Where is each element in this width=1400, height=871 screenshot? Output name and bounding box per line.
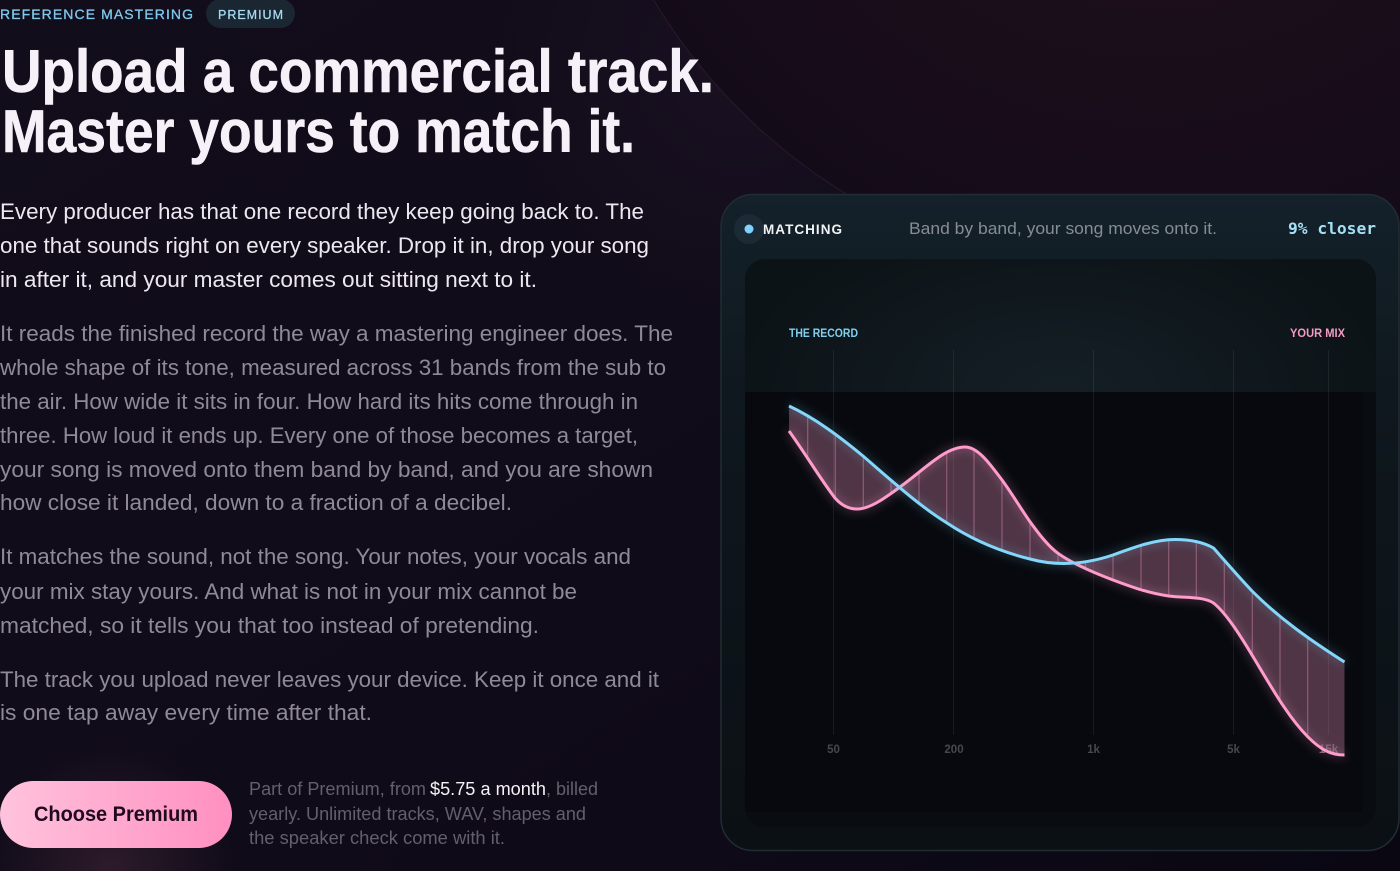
curve: your mix (789, 431, 1344, 755)
title: Upload a commercial track. (2, 38, 714, 105)
eyebrow label: REFERENCE MASTERING (0, 6, 193, 22)
title: Master yours to match it. (2, 98, 635, 165)
lead paragraph: in after it, and your master comes out sitting next to it. (0, 267, 537, 292)
lead paragraph (0, 199, 649, 292)
paragraph: how it reads the record (0, 321, 673, 515)
paragraph: how it reads the record: your song is moved onto them band by band, and you are shown (0, 457, 653, 482)
paragraph: how it reads the record: the air. How wide it sits in four. How hard its hits come through in (0, 389, 638, 414)
paragraph: sound not song: your mix stay yours. And what is not in your mix cannot be (0, 579, 577, 604)
paragraph: privacy: is one tap away every time after that. (0, 700, 372, 725)
status indicator: MATCHING (763, 222, 842, 237)
frequency tick labels: 200 (944, 744, 964, 756)
pricing note: yearly. Unlimited tracks, WAV, shapes and (249, 804, 586, 824)
pricing note: Part of Premium, from (249, 779, 426, 799)
paragraph: how it reads the record: It reads the finished record the way a mastering engineer does. The (0, 321, 673, 346)
paragraph: sound not song (0, 544, 631, 638)
premium pill: PREMIUM (218, 8, 283, 22)
lead paragraph: one that sounds right on every speaker. Drop it in, drop your song (0, 233, 649, 258)
frequency tick labels: 1k (1087, 744, 1100, 756)
paragraph: sound not song: matched, so it tells you that too instead of pretending. (0, 613, 539, 638)
button: choose premium: Choose Premium (34, 803, 198, 826)
frequency tick labels (827, 744, 1339, 756)
paragraph: how it reads the record: how close it landed, down to a fraction of a decibel. (0, 490, 512, 515)
difference area (789, 406, 1344, 755)
pricing note: the speaker check come with it. (249, 828, 505, 848)
eyebrow (0, 0, 295, 28)
paragraph: sound not song: It matches the sound, not the song. Your notes, your vocals and (0, 544, 631, 569)
frequency tick labels: 50 (827, 744, 840, 756)
status indicator (734, 214, 842, 244)
lead paragraph: Every producer has that one record they keep going back to. The (0, 199, 644, 224)
legend: the record: THE RECORD (789, 328, 858, 340)
chart: frequency curves (745, 259, 1376, 827)
frequency tick labels: 5k (1227, 744, 1240, 756)
pricing note (249, 779, 598, 848)
curve: the record (789, 406, 1344, 662)
legend: your mix: YOUR MIX (1290, 328, 1345, 340)
paragraph: privacy (0, 667, 660, 725)
button: choose premium (0, 781, 232, 848)
progress readout: 9% closer (1288, 219, 1376, 238)
title (2, 38, 714, 165)
paragraph: how it reads the record: three. How loud it ends up. Every one of those becomes a target, (0, 423, 638, 448)
paragraph: how it reads the record: whole shape of its tone, measured across 31 bands from the sub to (0, 355, 666, 380)
pricing note: $5.75 a month (430, 779, 546, 799)
frequency tick labels: 15k (1319, 744, 1339, 756)
pricing note: , billed (546, 779, 598, 799)
card caption: Band by band, your song moves onto it. (909, 219, 1217, 238)
premium pill (206, 0, 295, 28)
panel: matching card (721, 194, 1399, 850)
paragraph: privacy: The track you upload never leaves your device. Keep it once and it (0, 667, 660, 692)
